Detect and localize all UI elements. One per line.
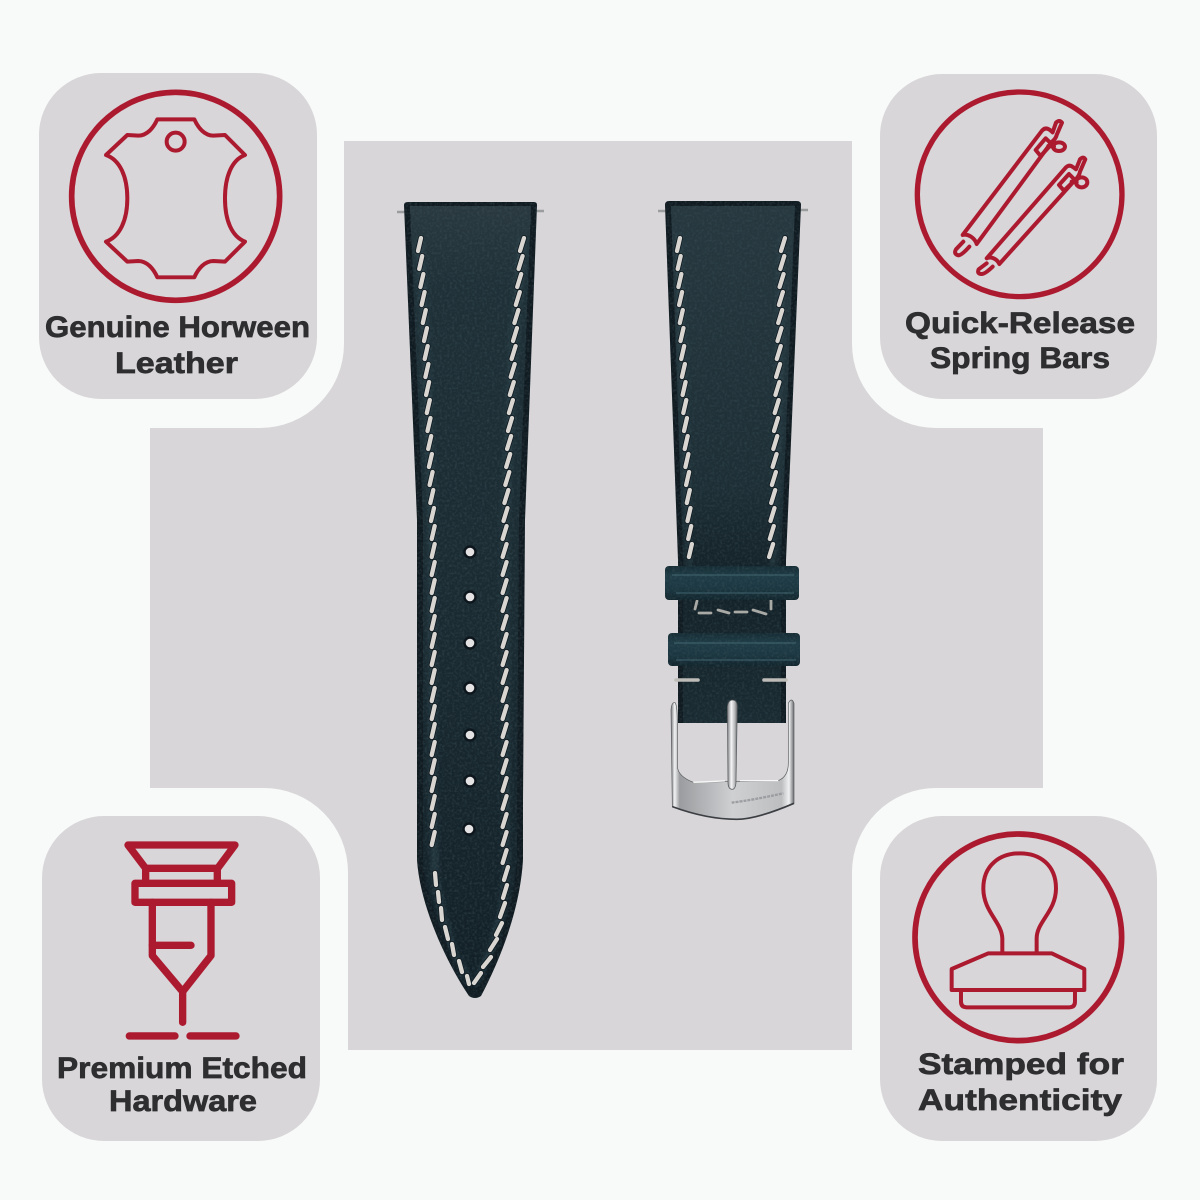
- label: Quick-Release: [905, 307, 1135, 340]
- buckle tongue: [727, 700, 737, 789]
- label: Premium Etched: [57, 1052, 307, 1085]
- icon: etching laser: [128, 845, 236, 1036]
- card background: [880, 816, 1157, 1141]
- icon: spring bars: [917, 92, 1122, 297]
- label: Authenticity: [918, 1084, 1122, 1117]
- lower strap highlight: [684, 698, 780, 710]
- label: Spring Bars: [930, 342, 1110, 375]
- stitching: [676, 238, 786, 680]
- label: Leather: [115, 347, 238, 380]
- card: Genuine Horween Leather: [39, 73, 317, 399]
- stitching haze: [419, 238, 522, 982]
- keeper loops: [665, 566, 800, 666]
- buckle frame: [671, 700, 794, 819]
- left watch strap: [397, 202, 544, 998]
- icon: leather hide: [72, 92, 280, 300]
- label: [45, 311, 310, 380]
- card: Stamped for Authenticity: [880, 816, 1157, 1141]
- left stitching: [418, 238, 524, 984]
- label: [57, 1052, 307, 1118]
- label: Stamped for: [918, 1048, 1124, 1081]
- card: Premium Etched Hardware: [42, 816, 320, 1141]
- icon: rubber stamp: [915, 834, 1122, 1041]
- strap body: [404, 202, 537, 998]
- card: Quick-Release Spring Bars: [880, 74, 1157, 399]
- card background: [39, 73, 317, 399]
- label: Hardware: [109, 1085, 257, 1118]
- spring bar pins: [658, 210, 808, 211]
- label: [905, 307, 1135, 375]
- strap holes: [464, 546, 476, 834]
- card background: [42, 816, 320, 1141]
- strap body: [665, 201, 801, 723]
- spring bar pins: [397, 211, 544, 212]
- central gray backdrop: [150, 141, 1043, 1050]
- label: [918, 1048, 1124, 1117]
- right watch strap with buckle: [658, 201, 808, 819]
- label: Genuine Horween: [45, 311, 310, 344]
- card background: [880, 74, 1157, 399]
